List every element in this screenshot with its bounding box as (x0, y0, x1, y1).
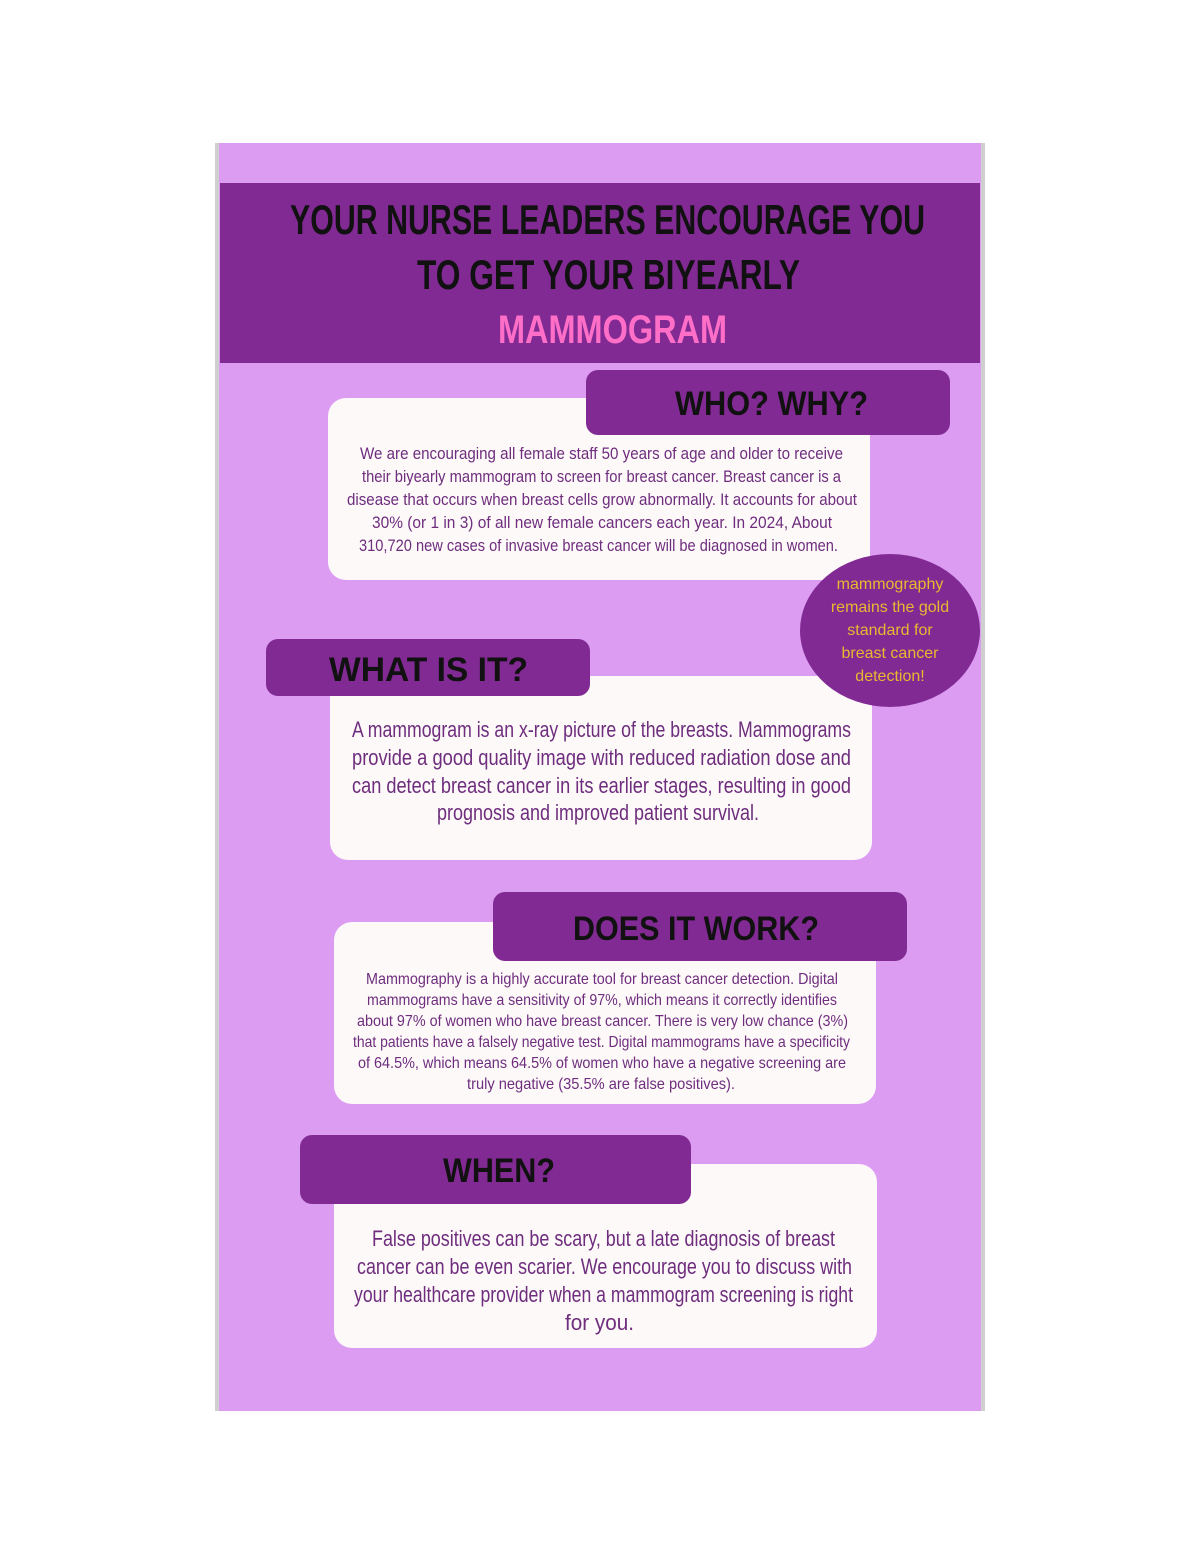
panel: who why text (328, 398, 870, 580)
panel: who why text: We are encouraging all female staff 50 years of age and older to receive (360, 444, 843, 463)
callout: gold standard circle: detection! (855, 668, 925, 685)
panel: what is it text: prognosis and improved patient survival. (437, 800, 759, 825)
panel: when text: your healthcare provider when a mammogram screening is right (354, 1282, 853, 1307)
panel: what is it text (330, 676, 872, 860)
panel: does it work text (334, 922, 876, 1104)
panel: when text: cancer can be even scarier. We encourage you to discuss with (357, 1254, 852, 1279)
page background panel (215, 143, 985, 1411)
panel: does it work text: mammograms have a sensitivity of 97%, which means it correctly identifies (367, 992, 837, 1009)
panel: when text: for you. (565, 1310, 634, 1335)
title band: MAMMOGRAM (498, 308, 727, 352)
panel: who why text: disease that occurs when breast cells grow abnormally. It accounts for about (347, 490, 857, 509)
heading: what is it (266, 639, 590, 696)
panel: when text (334, 1164, 877, 1348)
heading: does it work (493, 892, 907, 961)
panel: what is it text: can detect breast cancer in its earlier stages, resulting in good (352, 773, 851, 798)
heading: who why: WHO? WHY? (675, 385, 868, 423)
callout: gold standard circle: breast cancer (842, 645, 938, 662)
panel: does it work text: that patients have a falsely negative test. Digital mammograms have a specificity (353, 1034, 850, 1051)
callout: gold standard circle: mammography (837, 576, 943, 593)
heading: what is it: WHAT IS IT? (329, 651, 528, 689)
title band: YOUR NURSE LEADERS ENCOURAGE YOU (290, 196, 925, 243)
panel: does it work text: about 97% of women who have breast cancer. There is very low chance (3%) (357, 1013, 848, 1030)
panel: when text: False positives can be scary, but a late diagnosis of breast (372, 1226, 835, 1251)
title band (220, 183, 980, 363)
panel: does it work text: truly negative (35.5% are false positives). (467, 1076, 735, 1093)
panel: what is it text: provide a good quality image with reduced radiation dose and (352, 745, 851, 770)
panel: who why text: 310,720 new cases of invasive breast cancer will be diagnosed in women. (359, 536, 838, 555)
panel: does it work text: Mammography is a highly accurate tool for breast cancer detection. Digital (366, 971, 838, 988)
callout: gold standard circle (800, 554, 980, 707)
heading: when (300, 1135, 691, 1204)
panel: what is it text: A mammogram is an x-ray picture of the breasts. Mammograms (352, 717, 851, 742)
heading: who why (586, 370, 950, 435)
heading: when: WHEN? (443, 1152, 555, 1190)
title band: TO GET YOUR BIYEARLY (417, 251, 800, 298)
callout: gold standard circle: standard for (847, 622, 933, 639)
panel: does it work text: of 64.5%, which means 64.5% of women who have a negative screening are (358, 1055, 846, 1072)
panel: who why text: their biyearly mammogram to screen for breast cancer. Breast cancer is a (362, 467, 841, 486)
callout: gold standard circle: remains the gold (831, 599, 949, 616)
heading: does it work: DOES IT WORK? (573, 910, 819, 948)
panel: who why text: 30% (or 1 in 3) of all new female cancers each year. In 2024, About (372, 513, 832, 532)
